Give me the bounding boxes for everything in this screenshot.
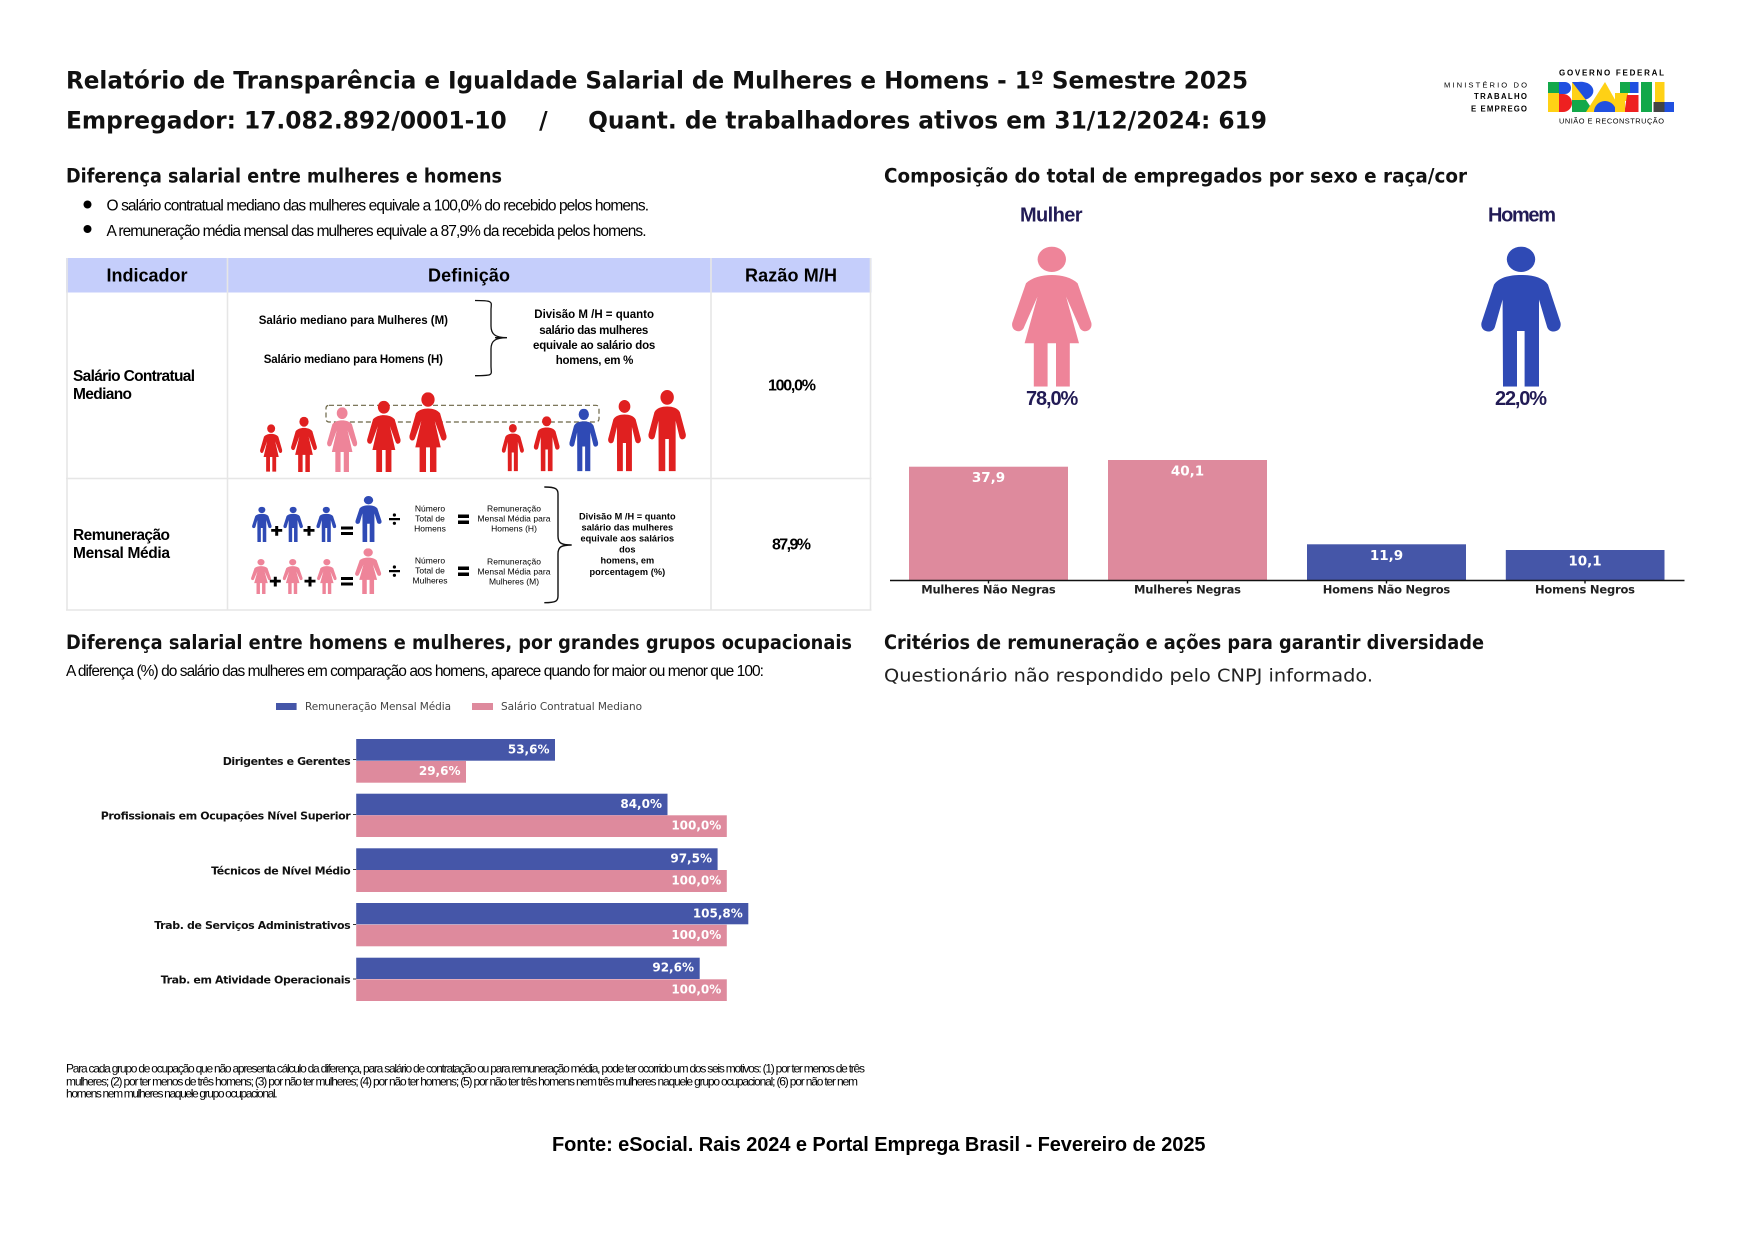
bar chart: composição por sexo e raça: 11,9	[1370, 548, 1403, 564]
bullet list: O salário contratual mediano das mulheres equivale a 100,0% do recebido pelos homens.	[106, 198, 649, 215]
table header	[66, 258, 872, 292]
group: serviços administrativos: 100,0%	[671, 928, 721, 942]
bar chart: composição por sexo e raça: Homens Negros	[1535, 582, 1635, 596]
title	[66, 66, 1267, 134]
division explanation	[533, 309, 655, 367]
logo: ministério: MINISTÉRIO DO	[1444, 81, 1527, 90]
formula labels: Número	[415, 504, 445, 514]
footnote: homens nem mulheres naquele grupo ocupacional.	[66, 1087, 278, 1101]
formula labels: Total de	[415, 514, 445, 524]
footnote: Para cada grupo de ocupação que não apresenta cálculo da diferença, para salário de contratação ou para remuneração média, pode ter ocorrido um dos seis motivos: (1) por ter menos de três	[66, 1062, 865, 1076]
operators	[270, 513, 469, 586]
icons: women and men by order	[260, 390, 686, 472]
pictogram: mulher: Mulher	[1020, 205, 1083, 227]
logo: governo federal brasil: UNIÃO E RECONSTRUÇÃO	[1559, 117, 1664, 126]
row: remuneração mensal média	[73, 487, 811, 603]
group: profissionais	[101, 794, 727, 837]
division explanation: Divisão M /H = quanto	[534, 309, 654, 321]
text: questionário: Questionário não respondido pelo CNPJ informado.	[884, 666, 1373, 686]
group: serviços administrativos: 105,8%	[693, 906, 743, 920]
source: Fonte: eSocial. Rais 2024 e Portal Emprega Brasil - Fevereiro de 2025	[552, 1134, 1206, 1156]
row: remuneração mensal média: Remuneração	[73, 527, 170, 544]
formula labels: Remuneração	[487, 557, 541, 567]
group: atividade operacional	[161, 958, 727, 1001]
division explanation: salário das mulheres	[581, 523, 673, 533]
heading: critérios: Critérios de remuneração e ações para garantir diversidade	[884, 631, 1484, 654]
group: atividade operacional: 100,0%	[671, 982, 721, 996]
group: técnicos: 97,5%	[670, 852, 712, 866]
brace	[544, 487, 572, 603]
division explanation: dos	[619, 545, 635, 555]
formula labels: Homens	[414, 524, 446, 534]
group: dirigentes e gerentes: 29,6%	[419, 764, 460, 778]
bar chart: grupos ocupacionais	[101, 739, 748, 1001]
group: profissionais: 100,0%	[671, 818, 721, 832]
bar chart: composição por sexo e raça: 10,1	[1568, 554, 1602, 570]
pictogram: homem: 22,0%	[1495, 388, 1547, 410]
bar chart: composição por sexo e raça: 37,9	[972, 470, 1005, 486]
division explanation	[579, 512, 676, 577]
group: serviços administrativos: Trab. de Serviços Administrativos	[154, 919, 351, 932]
division explanation: equivale ao salário dos	[533, 340, 655, 352]
table	[66, 258, 872, 610]
logo: governo federal brasil	[1548, 69, 1674, 126]
bar chart: composição por sexo e raça: Homens Não Negros	[1323, 582, 1450, 596]
table header: Indicador	[106, 266, 188, 286]
division explanation: Divisão M /H = quanto	[579, 512, 676, 522]
formula labels: Mulheres (M)	[489, 576, 539, 586]
row: salário contratual mediano: Salário mediano para Homens (H)	[264, 354, 443, 366]
legend	[276, 701, 642, 713]
icons: men sum	[252, 496, 382, 542]
formula labels: Remuneração	[487, 504, 541, 514]
division explanation: salário das mulheres	[539, 325, 648, 337]
brace	[475, 300, 507, 376]
pictogram: mulher	[1012, 205, 1092, 410]
footnote	[66, 1062, 865, 1101]
legend: Salário Contratual Mediano	[501, 701, 642, 713]
title: Empregador: 17.082.892/0001-10 / Quant. de trabalhadores ativos em 31/12/2024: 619	[66, 106, 1267, 134]
group: atividade operacional: 92,6%	[652, 961, 694, 975]
formula labels: Mensal Média para	[478, 514, 551, 524]
group: técnicos: 100,0%	[671, 873, 721, 887]
logo: ministério: E EMPREGO	[1471, 104, 1527, 113]
pictogram: homem	[1481, 205, 1561, 410]
row: salário contratual mediano: Salário Contratual	[73, 368, 195, 385]
group: dirigentes e gerentes: 53,6%	[508, 742, 550, 756]
table header: Razão M/H	[745, 266, 837, 286]
row: salário contratual mediano: 100,0%	[768, 378, 816, 394]
bar chart: composição por sexo e raça	[890, 460, 1684, 596]
row: salário contratual mediano	[73, 300, 816, 472]
group: atividade operacional: Trab. em Atividade Operacionais	[161, 973, 351, 986]
group: profissionais: 84,0%	[620, 797, 662, 811]
logo: ministério	[1444, 81, 1527, 113]
group: serviços administrativos	[154, 903, 748, 946]
subtitle: A diferença (%) do salário das mulheres em comparação aos homens, aparece quando for maior ou menor que 100:	[66, 663, 764, 680]
bar chart: composição por sexo e raça: Mulheres Negras	[1134, 582, 1241, 596]
legend: Remuneração Mensal Média	[305, 701, 451, 713]
heading: diferença por grupos ocupacionais: Diferença salarial entre homens e mulheres, por grandes grupos ocupacionais	[66, 631, 852, 654]
group: técnicos: Técnicos de Nível Médio	[211, 864, 351, 877]
pictogram: homem: Homem	[1488, 205, 1556, 227]
formula labels: Mensal Média para	[478, 566, 551, 576]
bar chart: composição por sexo e raça: Mulheres Não Negras	[921, 582, 1056, 596]
row: salário contratual mediano: Salário mediano para Mulheres (M)	[259, 315, 448, 327]
group: profissionais: Profissionais em Ocupações Nível Superior	[101, 810, 351, 823]
row: remuneração mensal média: Mensal Média	[73, 545, 170, 562]
logo: governo federal brasil: GOVERNO FEDERAL	[1559, 69, 1664, 78]
group: dirigentes e gerentes: Dirigentes e Gerentes	[223, 755, 351, 768]
formula labels	[413, 504, 551, 586]
group: técnicos	[211, 848, 727, 892]
row: salário contratual mediano: Mediano	[73, 386, 132, 403]
row: remuneração mensal média: 87,9%	[772, 536, 811, 554]
division explanation: homens, em %	[556, 355, 633, 367]
formula labels: Homens (H)	[491, 524, 537, 534]
group: dirigentes e gerentes	[223, 739, 555, 783]
division explanation: porcentagem (%)	[589, 567, 665, 577]
pictogram: mulher: 78,0%	[1026, 388, 1079, 410]
heading: composição: Composição do total de empregados por sexo e raça/cor	[884, 165, 1467, 188]
division explanation: homens, em	[600, 556, 654, 566]
bullet list: A remuneração média mensal das mulheres equivale a 87,9% da recebida pelos homens.	[106, 223, 647, 240]
title: Relatório de Transparência e Igualdade Salarial de Mulheres e Homens - 1º Semestre 2025	[66, 66, 1248, 94]
bullet list	[84, 198, 649, 240]
footnote: mulheres; (2) por ter menos de três homens; (3) por não ter mulheres; (4) por não ter homens; (5) por não ter três homens nem três mulheres naquele grupo ocupacional; (6) por não ter nem	[66, 1074, 858, 1088]
heading: diferença salarial: Diferença salarial entre mulheres e homens	[66, 165, 502, 188]
division explanation: equivale aos salários	[580, 534, 674, 544]
bar chart: composição por sexo e raça: 40,1	[1171, 464, 1204, 480]
table header: Definição	[428, 266, 510, 286]
logo: ministério: TRABALHO	[1474, 92, 1527, 101]
formula labels: Mulheres	[413, 576, 447, 586]
formula labels: Total de	[415, 566, 445, 576]
icons: women sum	[251, 548, 381, 594]
formula labels: Número	[415, 556, 445, 566]
